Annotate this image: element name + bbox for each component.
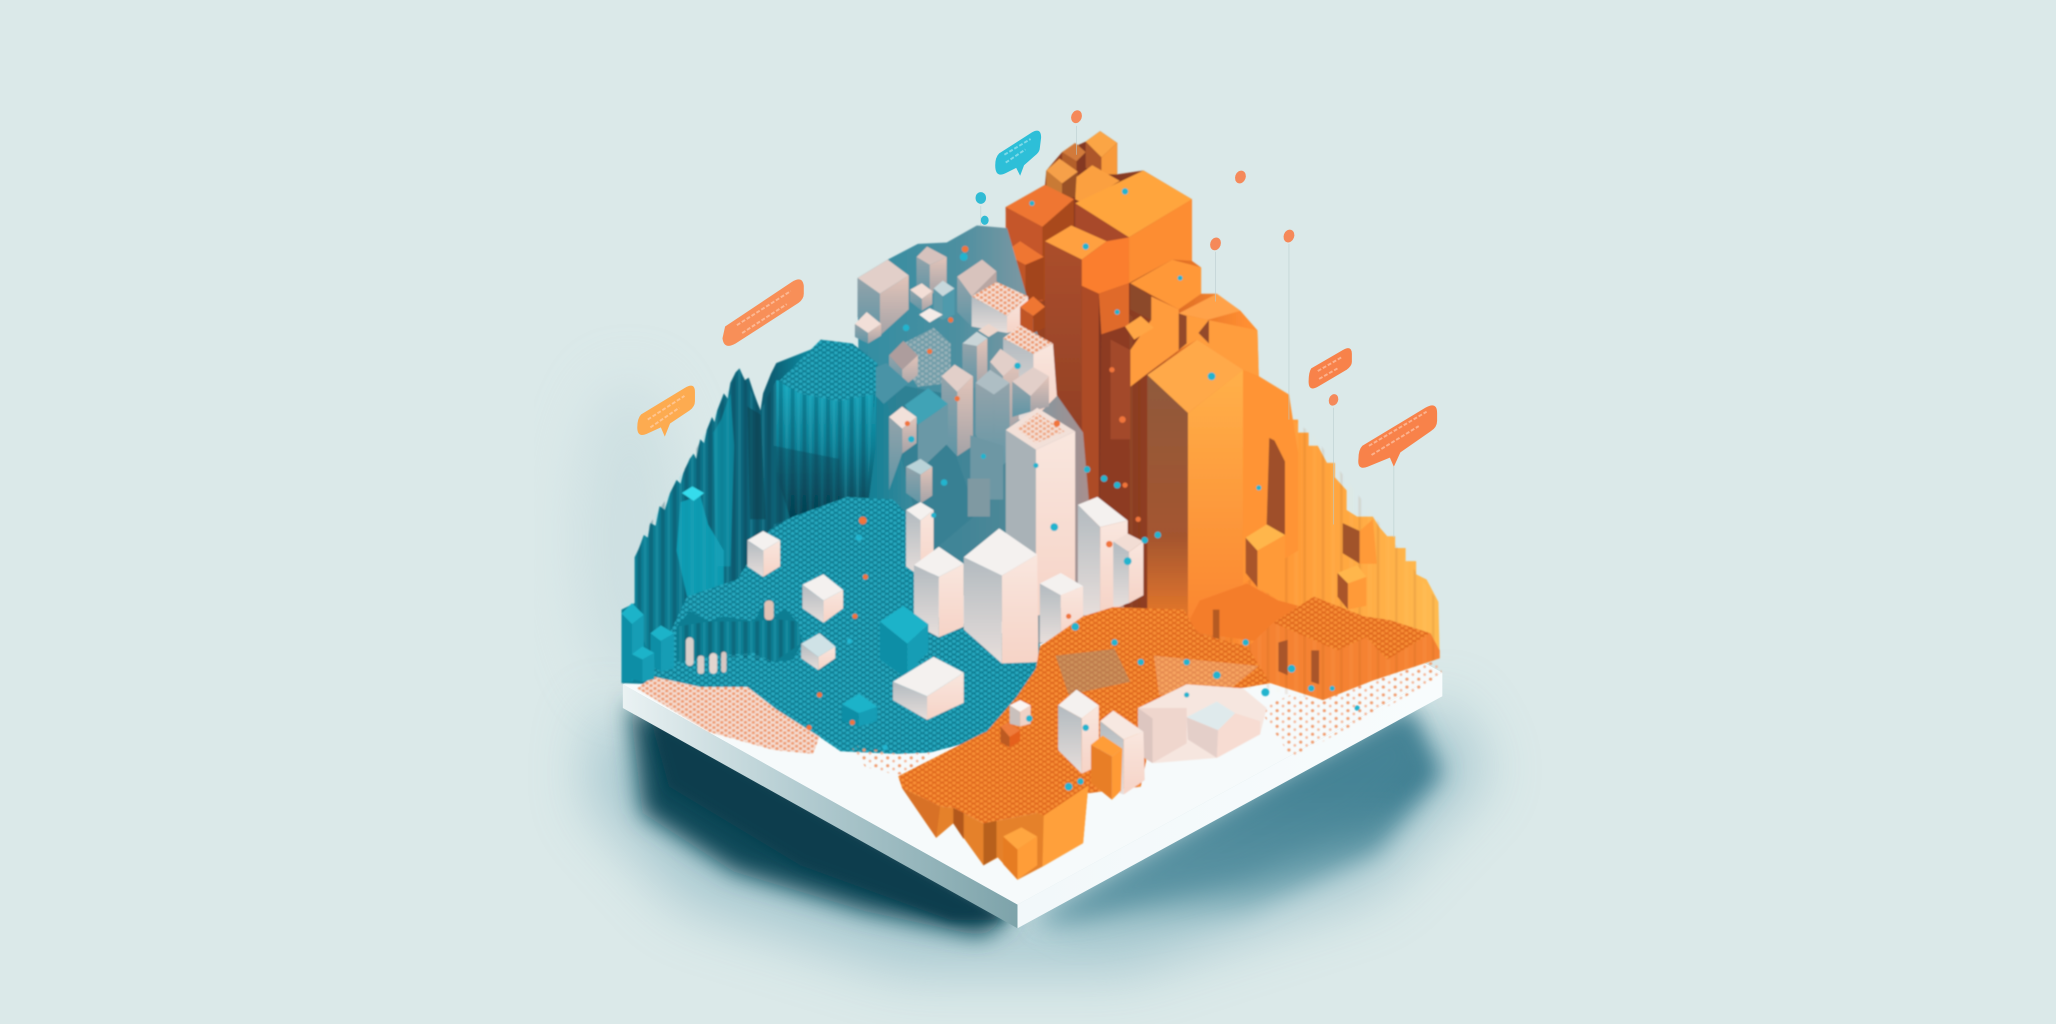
- teal block: small front: [842, 694, 877, 726]
- callout: orange top left: [722, 279, 804, 346]
- small orange red block: [1000, 722, 1020, 747]
- white cube: pale blue top: [801, 633, 835, 670]
- grey dotted patch: [903, 328, 951, 387]
- pale orange dotted patch: [637, 677, 820, 754]
- orange block: narrow tower: [1003, 241, 1044, 304]
- callout: orange right large: [1358, 405, 1437, 468]
- teal dotted ground: [636, 497, 1049, 754]
- small white cube on plateau: [1010, 700, 1031, 726]
- white block: tall back right: [1078, 497, 1128, 616]
- callout: orange right small: [1309, 348, 1352, 389]
- scattered dots strip right: [1259, 660, 1442, 758]
- platform shadow: [577, 380, 1488, 973]
- orange block: mid tower: [1045, 226, 1130, 616]
- white block: front second: [1100, 711, 1145, 795]
- white block: pink low: [1138, 708, 1187, 763]
- white block: large front: [893, 657, 964, 720]
- platform slab: [623, 446, 1442, 928]
- terrain model: [622, 131, 1442, 880]
- white block: right of centre: [1040, 573, 1083, 642]
- orange block: left shoulder: [1006, 185, 1074, 302]
- white cube: centre left: [802, 574, 843, 623]
- middle grey mass: [858, 226, 1128, 645]
- callout: teal top: [995, 131, 1041, 176]
- teal dotted upper plateau: [779, 340, 877, 401]
- orange block: front small: [1003, 827, 1037, 880]
- orange dotted ground right: [1273, 597, 1431, 660]
- orange dotted plateau with cliff: [898, 721, 1088, 880]
- orange block: main tower: [1075, 170, 1192, 283]
- white block: tallest centre: [964, 528, 1038, 663]
- white tower with dotted roof: [1006, 408, 1075, 616]
- pale dotted fringe: [850, 745, 930, 776]
- small teal spike cluster: [677, 606, 802, 662]
- orange blocks: lower right slope: [1188, 370, 1377, 642]
- orange lower cliff columns: [1246, 623, 1440, 700]
- orange dotted ground centre: [983, 607, 1271, 793]
- orange mountain: back mass: [1006, 131, 1440, 700]
- orange block: tallest front tower: [1147, 340, 1243, 623]
- pale mottled patch over ground: [1138, 684, 1267, 763]
- orange blocks: right steps: [1111, 260, 1259, 439]
- white block: front tall: [1058, 690, 1099, 774]
- white block: upper left: [914, 547, 964, 637]
- white cube: mountain foot: [747, 531, 780, 577]
- callout: yellow left: [637, 386, 695, 437]
- white block: rear centre: [906, 502, 934, 577]
- teal dotted mound: [918, 642, 977, 701]
- teal block: large: [880, 606, 928, 679]
- pale pillars: [686, 601, 774, 674]
- grey-pink buildings cluster: [855, 246, 1057, 517]
- white block: flat roof with dots: [1187, 701, 1260, 758]
- orange block: front tower: [1091, 736, 1122, 800]
- floating orange particles: [806, 246, 1141, 730]
- white block: narrow right: [1113, 534, 1143, 607]
- orange blocks: summit: [1046, 131, 1120, 203]
- teal mountain with spikes: [622, 344, 918, 684]
- floating teal particles: [847, 188, 1360, 791]
- marker pins: [976, 109, 1394, 538]
- teal blocks: left corner: [622, 603, 674, 682]
